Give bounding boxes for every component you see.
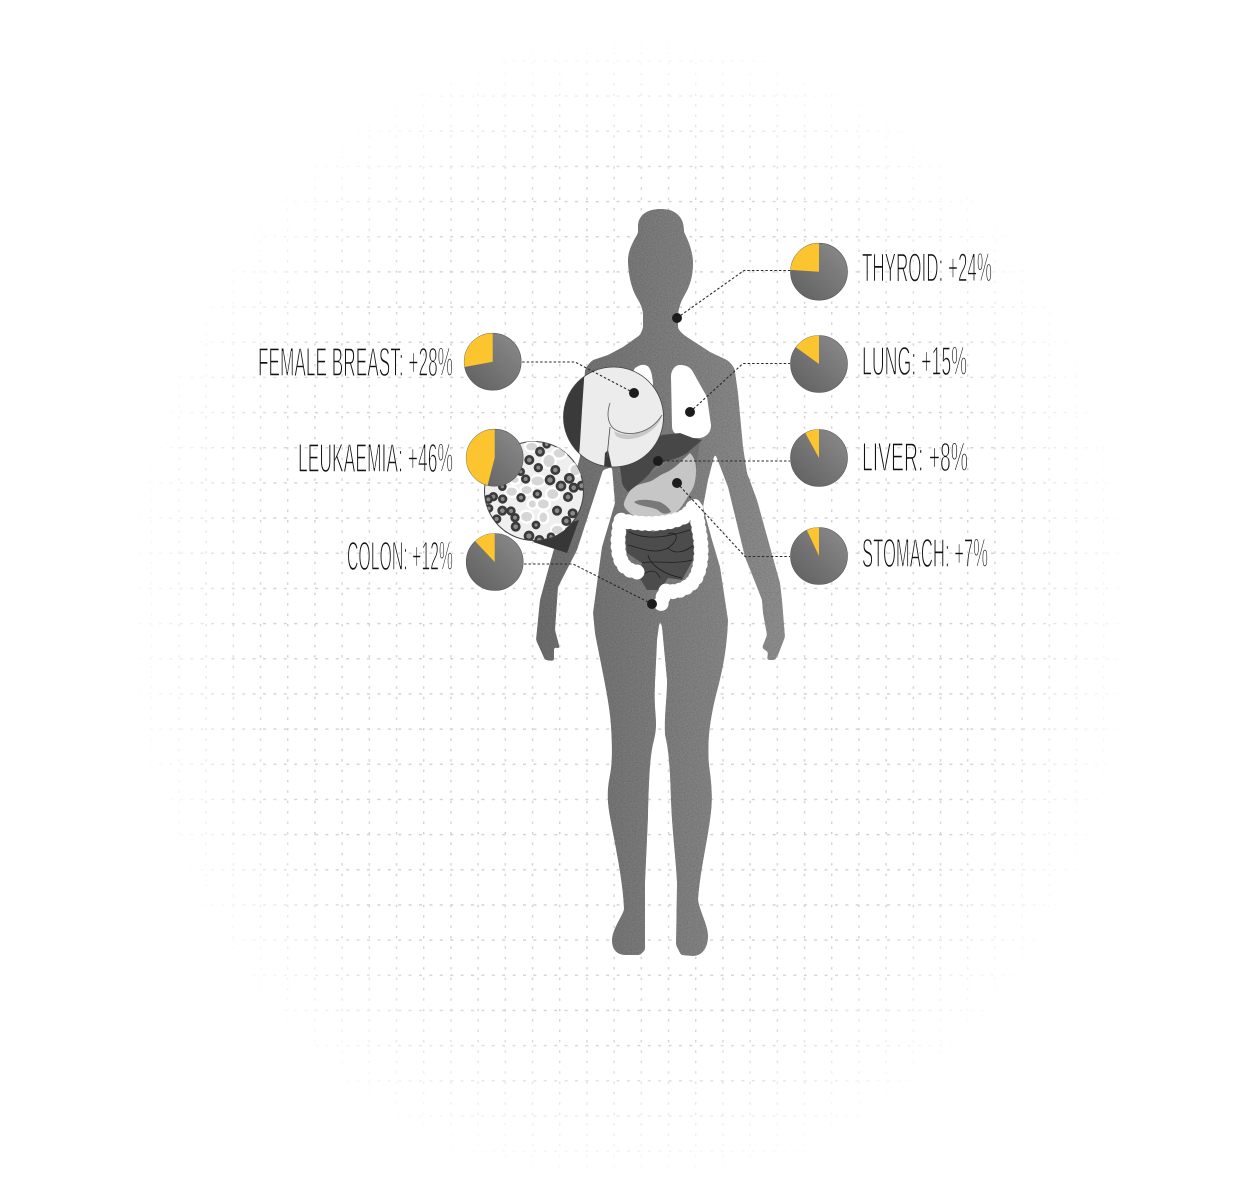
right lung <box>671 365 711 438</box>
stomach <box>624 440 700 518</box>
leader line and marker: liver <box>653 456 790 466</box>
pie: leukaemia +46% <box>466 429 523 486</box>
leader line and marker: thyroid <box>672 270 790 323</box>
liver <box>620 433 702 492</box>
pie: colon +12% <box>466 534 523 590</box>
infographic: cancer sites on a female body <box>149 60 1108 1166</box>
infographic: cancer sites on a female body: FEMALE BREAST: +28% <box>258 339 453 385</box>
magnified leukaemia blood cells circle <box>484 441 585 553</box>
infographic: cancer sites on a female body: LEUKAEMIA: +46% <box>298 435 453 481</box>
pie: liver +8% <box>790 430 848 486</box>
large intestine (colon) <box>618 505 701 607</box>
leader line and marker: lung <box>685 364 790 417</box>
pie: lung +15% <box>790 335 848 392</box>
left lung <box>630 365 653 398</box>
infographic: cancer sites on a female body: LUNG: +15% <box>862 338 967 384</box>
magnified breast circle <box>563 366 664 468</box>
pie: female breast +28% <box>464 333 521 390</box>
infographic: cancer sites on a female body: THYROID: +24% <box>862 244 992 290</box>
leader line and marker: female breast <box>522 362 639 398</box>
leader line and marker: colon <box>524 564 657 609</box>
pie: thyroid +24% <box>790 243 848 300</box>
small intestine <box>625 522 696 590</box>
dotted background grid <box>149 60 1108 1166</box>
pie: stomach +7% <box>790 528 848 584</box>
body silhouette <box>536 209 785 956</box>
infographic: cancer sites on a female body: LIVER: +8% <box>862 434 968 480</box>
infographic: cancer sites on a female body: COLON: +12% <box>347 533 453 579</box>
leader line and marker: stomach <box>672 478 790 556</box>
infographic: cancer sites on a female body: STOMACH: +7% <box>862 530 988 576</box>
